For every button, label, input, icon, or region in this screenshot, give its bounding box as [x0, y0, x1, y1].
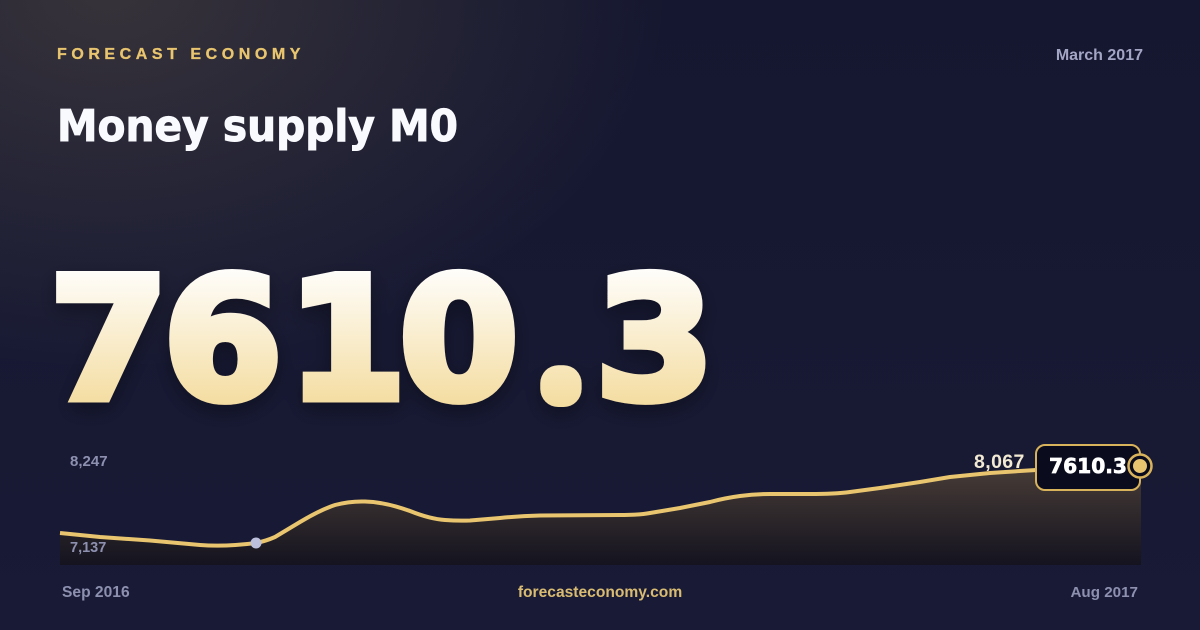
chart area fill [60, 468, 1141, 565]
low point marker [250, 538, 262, 548]
start date: Sep 2016 [62, 584, 130, 601]
axis min label: 7,137 [70, 540, 106, 556]
current value badge: 7610.3 [1049, 454, 1127, 478]
hero value: 7610. 3 [0, 243, 714, 439]
hero value: . [555, 362, 567, 397]
title: Money supply M0 [57, 101, 458, 152]
website: forecasteconomy.com [518, 584, 682, 601]
axis max label: 8,247 [70, 453, 108, 470]
date label: March 2017 [1056, 47, 1143, 64]
end date: Aug 2017 [1070, 584, 1138, 601]
area chart [60, 468, 1141, 565]
chart line [60, 470, 1036, 546]
brand label: FORECAST ECONOMY [57, 46, 305, 63]
current value marker [1128, 454, 1152, 478]
current value badge [1036, 445, 1140, 490]
peak label: 8,067 [974, 451, 1025, 473]
